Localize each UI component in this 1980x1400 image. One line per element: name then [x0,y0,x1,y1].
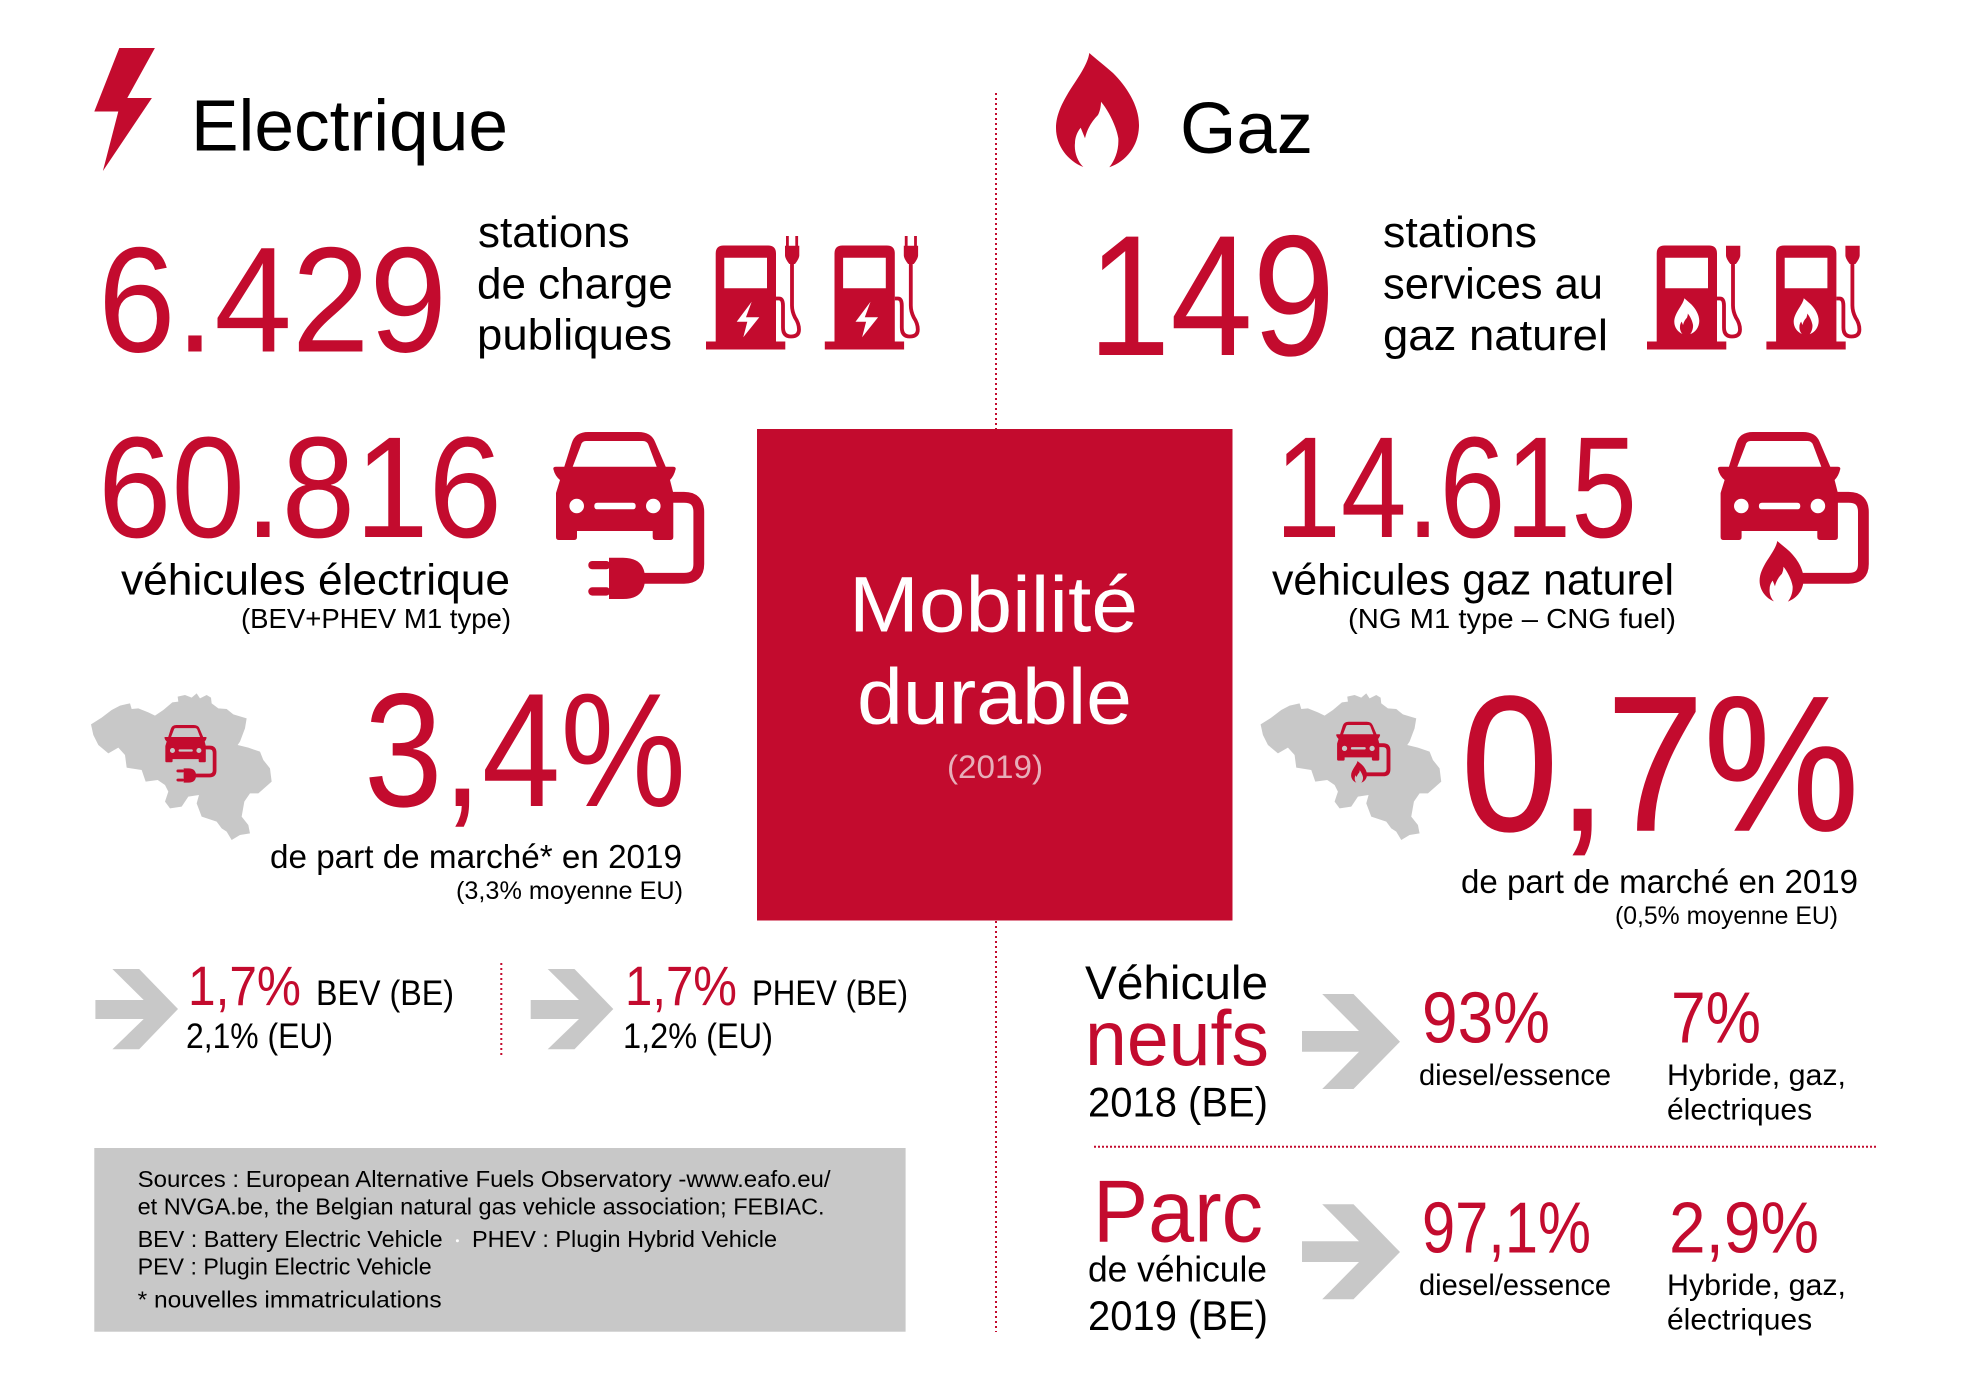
label: market share 2019: de part de marché* en 2019 [270,838,682,875]
stat: PHEV share [623,954,908,1056]
number 0,7%: 0,7% [1461,656,1859,871]
value 97,1%: 97,1% [1422,1189,1591,1269]
arrow: fleet [1302,1204,1400,1299]
text: sources line 1: Sources : European Alternative Fuels Observatory -www.eafo.eu/ [138,1166,831,1192]
icon: electric car with plug [553,432,699,599]
label: diesel/essence: diesel/essence [1419,1059,1611,1092]
subtitle: 2019: (2019) [947,749,1043,785]
icon: lightning bolt [94,48,155,171]
title: Mobilité durable: Mobilité [849,560,1138,648]
text: Véhicule: Véhicule [1085,956,1268,1009]
stat: fleet hybrid [1667,1189,1846,1336]
label: stations de charge publiques: publiques [477,310,672,360]
label: diesel/essence: diesel/essence [1419,1269,1611,1302]
block: fleet heading [1088,1162,1268,1339]
label: BEV+PHEV M1 type: (BEV+PHEV M1 type) [241,603,511,634]
label: BEV (BE): BEV (BE) [316,974,454,1013]
text: sources line 2: et NVGA.be, the Belgian natural gas vehicle association; FEBIAC. [138,1194,825,1220]
label: Hybride, gaz, électriques: Hybride, gaz, [1667,1059,1846,1092]
icon: gas station 1 [1647,246,1740,350]
heading: Electrique: Electrique [191,86,508,166]
stat: BEV share [186,954,454,1056]
stat: fleet diesel [1419,1189,1611,1302]
stat: new vehicles diesel [1419,979,1611,1092]
number 3,4%: 3,4% [364,660,686,841]
label: EU average 3,3%: (3,3% moyenne EU) [456,877,683,905]
map: Belgium with gas car [1261,693,1441,840]
stat: electric market share [270,660,686,905]
stat: new vehicles hybrid [1667,979,1846,1126]
text: 2019 (BE): 2019 (BE) [1088,1292,1268,1339]
value 2,9%: 2,9% [1669,1189,1819,1269]
heading: Gaz: Gaz [1180,89,1313,169]
label: véhicules électrique: véhicules électrique [121,556,510,604]
value 1,7% PHEV: 1,7% [625,954,737,1017]
label: stations services au gaz naturel: gaz naturel [1383,311,1608,360]
block: new vehicles heading [1085,956,1269,1126]
label: market share 2019: de part de marché en 2019 [1461,863,1858,900]
label: Hybride, gaz, électriques: électriques [1667,1093,1812,1126]
center panel: Mobilité durable [757,429,1232,920]
stat: gas market share [1461,656,1859,930]
stat: electric stations [98,208,673,384]
icon: gas station 2 [1766,246,1860,350]
label: NG M1 type CNG fuel: (NG M1 type – CNG fuel) [1348,603,1676,634]
text: BEV definition: BEV : Battery Electric Vehicle [138,1226,443,1252]
text: footnote: * nouvelles immatriculations [138,1286,442,1312]
value 93%: 93% [1422,979,1550,1059]
text: 2018 (BE): 2018 (BE) [1088,1079,1268,1126]
icon: electric charging station 1 [706,236,799,350]
number 60.816: 60.816 [98,407,502,568]
icon: electric charging station 2 [825,236,918,350]
label: Hybride, gaz, électriques: électriques [1667,1303,1812,1336]
value 7%: 7% [1671,979,1761,1059]
icon: flame [1056,53,1139,167]
stat: electric vehicles [98,407,511,634]
label: Hybride, gaz, électriques: Hybride, gaz, [1667,1269,1846,1302]
arrow: new vehicles [1302,994,1400,1089]
label: stations de charge publiques: de charge [477,260,673,308]
label: stations de charge publiques: stations [478,208,630,257]
map: Belgium with electric car [91,693,272,840]
number 14.615: 14.615 [1275,407,1637,568]
label: 2,1% EU: 2,1% (EU) [186,1017,333,1056]
label: stations services au gaz naturel: stations [1383,208,1537,257]
label: PHEV (BE): PHEV (BE) [752,974,908,1013]
text: PHEV definition: PHEV : Plugin Hybrid Vehicle [472,1226,777,1252]
panel: sources [94,1148,906,1332]
value 1,7% BEV: 1,7% [188,954,301,1017]
stat: gas vehicles [1272,407,1676,634]
text: neufs: neufs [1085,994,1269,1082]
text: PEV definition: PEV : Plugin Electric Vehicle [138,1254,432,1280]
label: stations services au gaz naturel: services au [1383,260,1603,308]
text: Parc: Parc [1093,1162,1263,1261]
label: 1,2% EU: 1,2% (EU) [623,1017,773,1056]
number 149: 149 [1088,200,1335,392]
stat: gas stations [1088,200,1608,392]
number 6.429: 6.429 [98,216,447,384]
label: véhicules gaz naturel: véhicules gaz naturel [1272,556,1674,604]
icon: gas car with flame [1718,432,1863,602]
arrow: PHEV [531,969,613,1049]
arrow: BEV [95,969,178,1049]
text: de véhicule: de véhicule [1088,1249,1267,1290]
title: Mobilité durable: durable [857,652,1132,741]
label: EU average 0,5%: (0,5% moyenne EU) [1615,902,1838,930]
vertical dotted divider [995,93,997,1332]
